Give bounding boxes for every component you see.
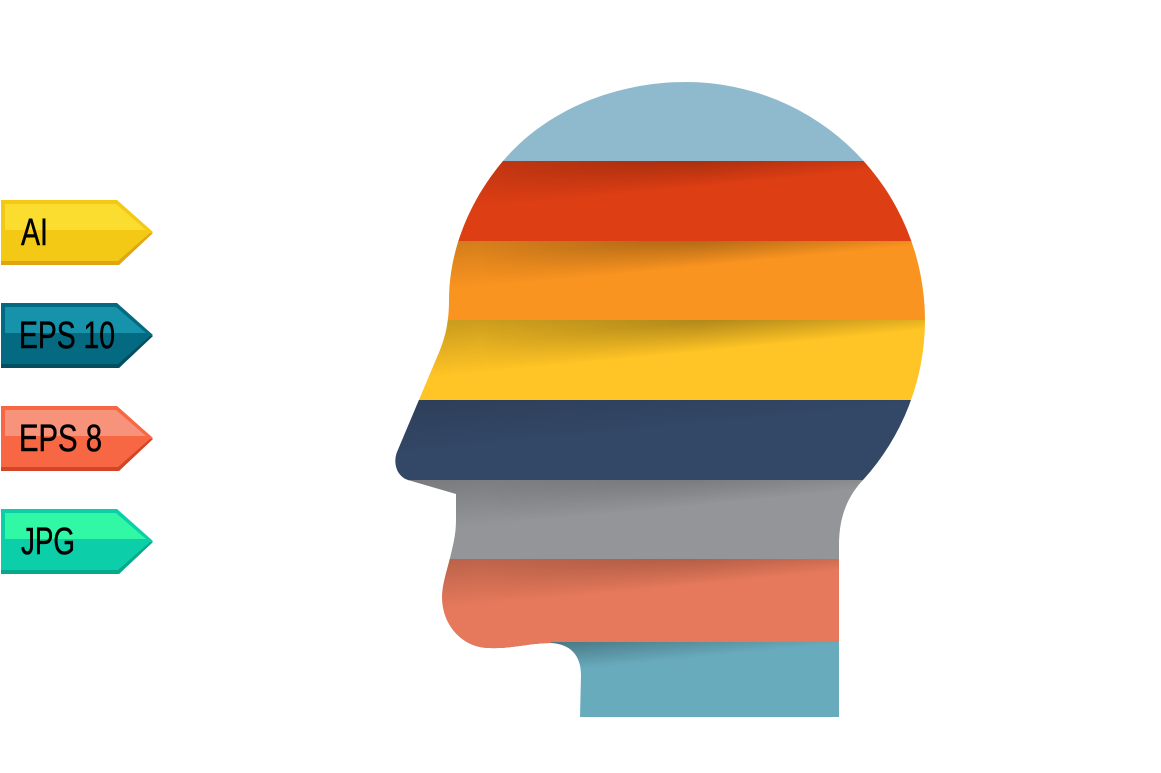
band: navy — [380, 400, 940, 480]
head silhouette with stacked colour bands — [380, 80, 940, 722]
band: orange — [448, 241, 925, 320]
tag: JPG: JPG — [21, 521, 75, 563]
tag: AI — [1, 200, 153, 265]
tag: EPS 8 — [1, 406, 153, 471]
band: salmon — [442, 559, 839, 642]
tag: AI: AI — [21, 212, 48, 254]
band: red — [458, 161, 912, 242]
band: grey — [408, 480, 863, 560]
chin: salmon underside — [464, 640, 551, 648]
tag: JPG — [1, 509, 153, 574]
tag: EPS 10: EPS 10 — [19, 315, 115, 357]
tag: EPS 10 — [1, 303, 153, 368]
band: yellow — [380, 320, 940, 400]
tag: EPS 8: EPS 8 — [19, 418, 102, 460]
band: light blue crown — [502, 82, 864, 162]
band: teal neck — [466, 642, 839, 717]
